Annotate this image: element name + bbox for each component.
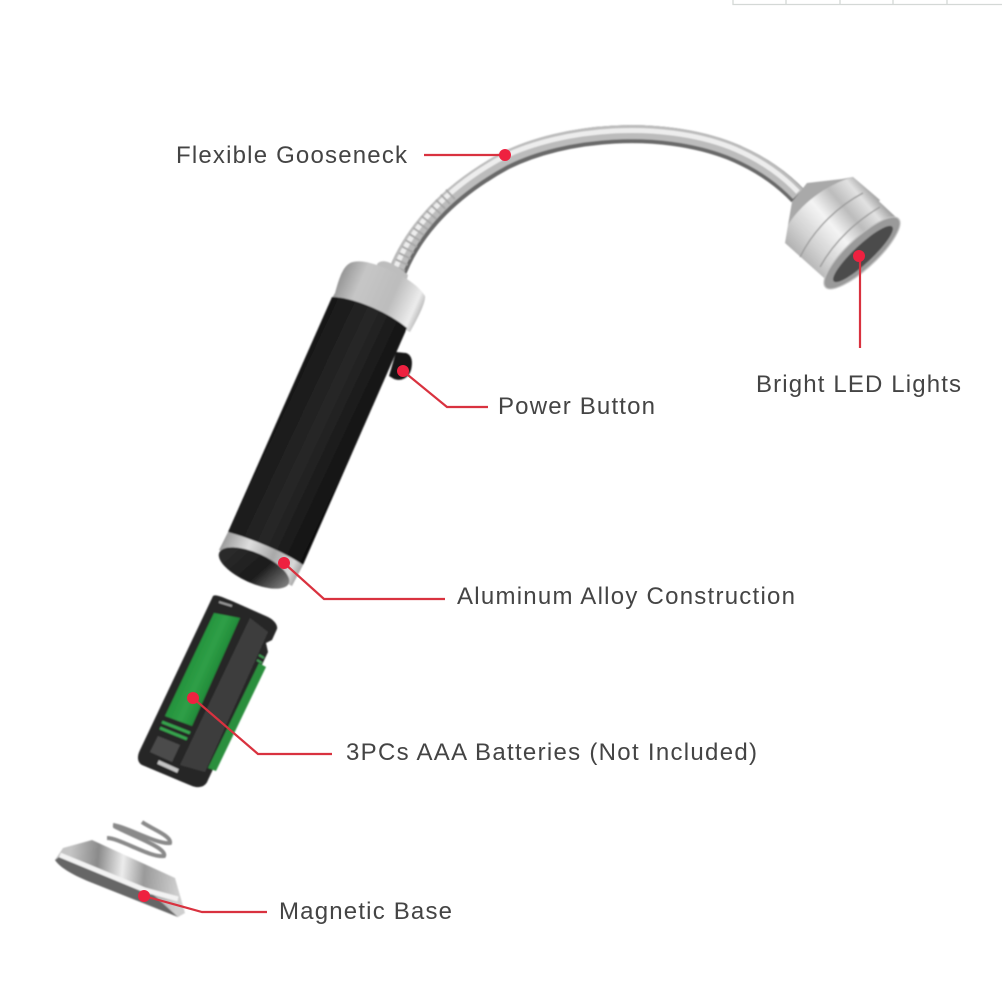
label: power button: Power Button <box>498 393 655 420</box>
cropped table fragment at top right <box>733 0 1002 4</box>
LED head <box>785 177 909 298</box>
label: aluminum alloy construction: Aluminum Alloy Construction <box>457 583 795 610</box>
callout lines <box>144 155 860 912</box>
callout markers <box>138 149 865 902</box>
aluminium end ring <box>213 532 303 597</box>
magnetic base <box>55 840 185 917</box>
label: batteries: 3PCs AAA Batteries (Not Included) <box>346 739 757 766</box>
handle body <box>228 297 407 565</box>
handle collar <box>332 261 425 332</box>
label: magnetic base: Magnetic Base <box>279 898 452 925</box>
label: bright LED lights: Bright LED Lights <box>756 371 961 398</box>
battery holder <box>138 595 277 787</box>
flashlight illustration <box>55 130 909 917</box>
power button <box>389 352 412 380</box>
label: flexible gooseneck: Flexible Gooseneck <box>176 142 408 169</box>
gooseneck <box>394 130 798 276</box>
spring <box>107 822 170 856</box>
